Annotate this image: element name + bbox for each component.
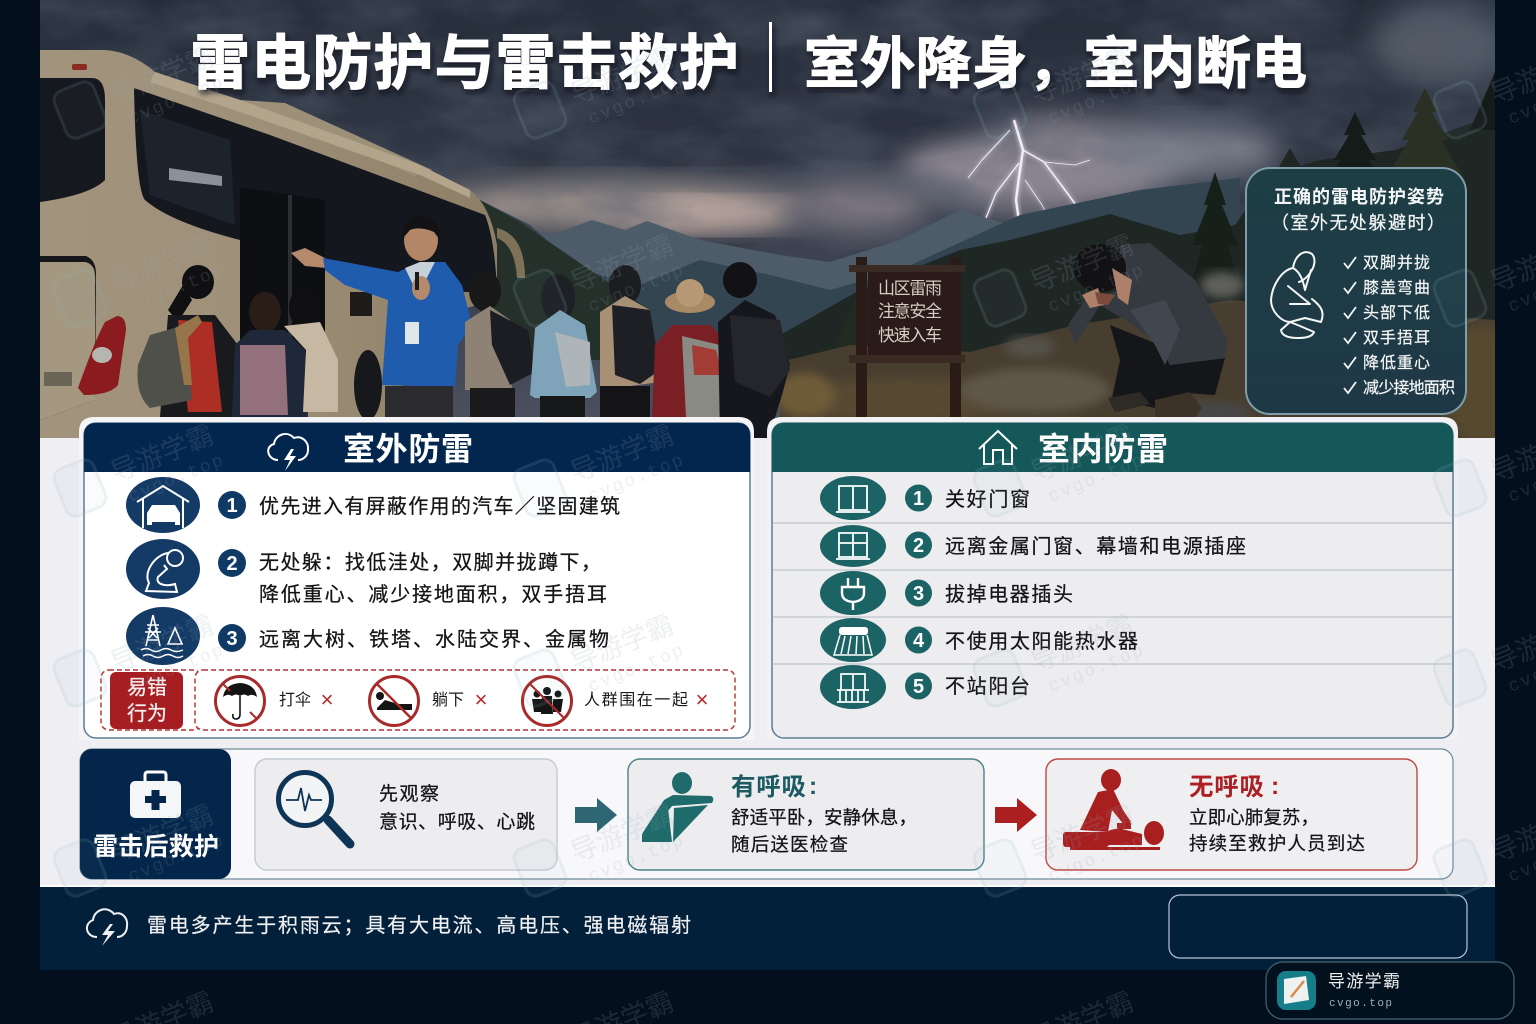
- watermark grid: 导游学霸: [106, 420, 218, 488]
- rescue label block: [80, 749, 231, 879]
- posture checklist: 膝盖弯曲: [1363, 279, 1430, 297]
- indoor item 2: away from metal: 远离金属门窗、幕墙和电源插座: [945, 535, 1246, 558]
- item 2: crouch low: [126, 539, 607, 606]
- icon: first aid kit: [130, 772, 181, 818]
- no-breathing heading: 无呼吸: [1189, 773, 1264, 801]
- watermark grid: cvgo.top: [126, 261, 228, 317]
- item 1: shelter in car or building: 1: [226, 495, 238, 517]
- posture checklist: 双手捂耳: [1363, 329, 1430, 347]
- indoor item 1: close doors and windows: 1: [913, 488, 924, 510]
- watermark grid: 导游学霸: [106, 230, 218, 298]
- watermark grid: 导游学霸: [106, 610, 218, 678]
- indoor header: [772, 423, 1453, 472]
- indoor item 5: stay off balcony: 不站阳台: [945, 675, 1030, 698]
- crouching man covering ears: [1068, 243, 1228, 418]
- panel: indoor protection: [767, 417, 1458, 740]
- step 1: observe: [255, 759, 557, 870]
- watermark grid: 导游学霸: [566, 42, 678, 110]
- rescue label block: 雷击后救护: [93, 833, 219, 861]
- item 3: avoid trees and towers: [126, 607, 609, 665]
- common mistakes strip: [101, 670, 735, 730]
- icon: storm cloud: [87, 909, 127, 946]
- icon: storm cloud: [268, 434, 308, 471]
- mistakes label: 易错: [127, 676, 167, 699]
- arrow: step 1 to step 2: [575, 798, 617, 832]
- item 2: crouch low: 2: [226, 553, 238, 575]
- left tourist group: [138, 265, 338, 417]
- wooden warning sign: 快速入车: [878, 326, 942, 345]
- wooden warning sign: [849, 257, 965, 417]
- mistakes label: 行为: [127, 702, 167, 725]
- item 1: shelter in car or building: 优先进入有屏蔽作用的汽车／坚固建筑: [259, 495, 620, 518]
- lightning fact: 雷电多产生于积雨云；具有大电流、高电压、强电磁辐射: [147, 914, 691, 937]
- indoor item 5: stay off balcony: 5: [913, 676, 924, 698]
- posture heading: [1271, 186, 1445, 233]
- item 1: shelter in car or building: [126, 477, 620, 533]
- stormy sky: [40, 0, 1510, 440]
- step 1: observe: 意识、呼吸、心跳: [379, 811, 535, 833]
- watermark grid: 导游学霸: [1026, 800, 1138, 868]
- breathing heading: 有呼吸: [731, 773, 806, 801]
- indoor item 5: stay off balcony: [820, 665, 1030, 709]
- watermark grid: cvgo.top: [1046, 641, 1148, 697]
- indoor item 4: no solar water heater: 不使用太阳能热水器: [945, 630, 1138, 653]
- indoor item 3: unplug appliances: [820, 571, 1073, 615]
- icon: house: [979, 431, 1017, 464]
- title: 雷电防护与雷击救护: [190, 30, 739, 97]
- step 2: breathing: 舒适平卧，安静休息，: [731, 807, 917, 828]
- icon: rescue pose: [642, 772, 713, 842]
- watermark grid: cvgo.top: [586, 73, 688, 129]
- mistake: lying down: 躺下: [432, 691, 464, 709]
- step 1: observe: 先观察: [379, 783, 439, 805]
- mistake: lying down: [370, 676, 487, 726]
- posture checklist: 降低重心: [1363, 354, 1430, 372]
- watermark grid: 导游学霸: [1026, 42, 1138, 110]
- step 3: no breathing: [1046, 759, 1417, 870]
- empty footer box: [1169, 895, 1467, 958]
- posture checklist: 头部下低: [1363, 304, 1430, 322]
- item 2: crouch low: 降低重心、减少接地面积，双手捂耳: [259, 583, 607, 606]
- step 2: breathing: 随后送医检查: [731, 834, 848, 855]
- indoor item 2: away from metal: [820, 525, 1246, 567]
- icon: brand map: [1277, 971, 1316, 1010]
- lightning bolt: [968, 120, 1090, 228]
- mistake: crowding together: [522, 676, 708, 726]
- posture checklist: [1344, 254, 1455, 397]
- item 2: crouch low: 无处躲：找低洼处，双脚并拢蹲下，: [259, 551, 601, 574]
- no-breathing heading: :: [1271, 773, 1279, 800]
- item 3: avoid trees and towers: 远离大树、铁塔、水陆交界、金属物: [259, 628, 609, 651]
- footer band: [40, 885, 1495, 970]
- wooden warning sign: 山区雷雨: [878, 279, 942, 298]
- indoor item 1: close doors and windows: [820, 476, 1030, 520]
- watermark grid: cvgo.top: [126, 451, 228, 507]
- watermark grid: 导游学霸: [566, 800, 678, 868]
- step 3: no breathing: 持续至救护人员到达: [1189, 833, 1365, 854]
- watermark grid: cvgo.top: [1046, 451, 1148, 507]
- right tourist group: [465, 262, 790, 440]
- panel: outdoor protection: [79, 417, 754, 740]
- watermark grid: cvgo.top: [126, 73, 228, 129]
- watermark grid: cvgo.top: [586, 451, 688, 507]
- watermark grid: cvgo.top: [1046, 73, 1148, 129]
- indoor header: 室内防雷: [1038, 431, 1168, 467]
- outdoor header: [84, 423, 750, 472]
- panel: post-strike rescue flow: [80, 749, 1453, 879]
- tour guide in blue jacket: [291, 216, 472, 420]
- watermark grid: cvgo.top: [586, 641, 688, 697]
- brand badge: cvgo.top: [1329, 998, 1392, 1010]
- step 2: breathing: [628, 759, 984, 870]
- indoor item 4: no solar water heater: [820, 618, 1138, 662]
- step 3: no breathing: 立即心肺复苏，: [1189, 807, 1319, 828]
- mistake: crowding together: ×: [696, 687, 708, 712]
- indoor item 2: away from metal: 2: [913, 535, 924, 557]
- watermark grid: 导游学霸: [1026, 420, 1138, 488]
- watermark grid: cvgo.top: [586, 261, 688, 317]
- outdoor header: 室外防雷: [343, 431, 473, 467]
- bus: [40, 50, 525, 440]
- indoor item 4: no solar water heater: 4: [913, 630, 925, 652]
- watermark grid: 导游学霸: [106, 42, 218, 110]
- watermark grid: cvgo.top: [586, 831, 688, 887]
- icon: CPR: [1063, 769, 1164, 850]
- mistake: umbrella: 打伞: [279, 691, 311, 709]
- arrow: step 2 to step 3: [995, 798, 1037, 832]
- light content background: [40, 438, 1495, 887]
- watermark grid: cvgo.top: [1046, 261, 1148, 317]
- mistake: umbrella: [216, 676, 333, 726]
- mistake: umbrella: ×: [321, 687, 333, 712]
- watermark grid: cvgo.top: [126, 641, 228, 697]
- watermark grid: 导游学霸: [566, 610, 678, 678]
- indoor item 3: unplug appliances: 拔掉电器插头: [945, 583, 1073, 606]
- indoor item 3: unplug appliances: 3: [913, 583, 924, 605]
- watermark grid: 导游学霸: [566, 420, 678, 488]
- title: 室外降身，室内断电: [804, 33, 1307, 95]
- title: [190, 22, 1307, 97]
- far mountains: [480, 178, 1240, 360]
- mistake: crowding together: 人群围在一起: [584, 691, 688, 709]
- mistake: lying down: ×: [475, 687, 487, 712]
- watermark grid: cvgo.top: [126, 831, 228, 887]
- posture heading: 正确的雷电防护姿势: [1274, 186, 1444, 207]
- forest ridge and pine trees: [780, 72, 1495, 360]
- icon: crouching figure outline: [1271, 252, 1323, 338]
- posture checklist: 双脚并拢: [1363, 254, 1430, 272]
- brand badge: [1266, 962, 1514, 1019]
- posture checklist: 减少接地面积: [1363, 379, 1455, 397]
- icon: magnifier with pulse: [278, 772, 350, 844]
- brand badge: 导游学霸: [1328, 972, 1400, 991]
- watermark grid: cvgo.top: [1046, 831, 1148, 887]
- rocky grass ground: [775, 272, 1522, 445]
- posture heading: （室外无处躲避时）: [1271, 213, 1445, 233]
- panel: correct lightning posture: [1246, 168, 1466, 414]
- item 3: avoid trees and towers: 3: [226, 628, 238, 650]
- watermark grid: 导游学霸: [566, 230, 678, 298]
- hero photo: bus and storm scene: [40, 0, 1522, 445]
- wooden warning sign: 注意安全: [878, 302, 942, 321]
- watermark grid: 导游学霸: [106, 800, 218, 868]
- watermark grid: 导游学霸: [1026, 610, 1138, 678]
- breathing heading: :: [809, 773, 817, 800]
- mistakes label: [110, 672, 183, 729]
- indoor item 1: close doors and windows: 关好门窗: [945, 488, 1030, 511]
- watermark grid: 导游学霸: [1026, 230, 1138, 298]
